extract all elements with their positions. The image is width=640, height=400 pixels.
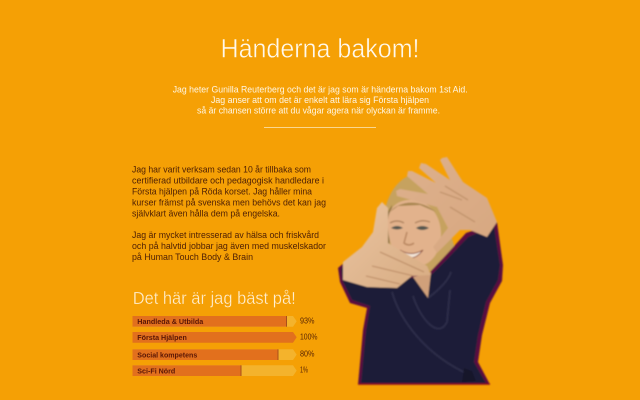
bar: Handleda & Utbilda 93% [132, 316, 315, 327]
bar: Handleda & Utbilda 93%: 93% [300, 316, 315, 325]
nose [404, 232, 414, 245]
hair [383, 176, 458, 276]
biography text: Jag har varit verksam sedan 10 år tillbaka som [132, 164, 311, 176]
bar: Handleda & Utbilda 93%: Handleda & Utbilda [137, 317, 204, 326]
intro text: Jag heter Gunilla Reuterberg och det är jag som är händerna bakom 1st Aid. [173, 84, 468, 96]
bar: Social kompetens 80%: 80% [300, 350, 315, 359]
biography text: Första hjälpen på Röda korset. Jag håller mina [132, 186, 313, 198]
bar: Social kompetens 80% [132, 349, 315, 360]
face [388, 200, 441, 266]
hand: right, raised fingers [396, 157, 497, 253]
bar: Social kompetens 80%: Social kompetens [137, 350, 197, 359]
hand: left, thumb and fingers [343, 202, 431, 288]
skill bars [132, 316, 318, 376]
intro text: Jag anser att om det är enkelt att lära sig Första hjälpen [211, 95, 429, 106]
title: Händerna bakom! [220, 34, 420, 64]
bar: Sci-Fi Nörd 1% [132, 365, 308, 376]
bar: Första Hjälpen 100%: Första Hjälpen [137, 333, 187, 342]
bar: Sci-Fi Nörd 1%: Sci-Fi Nörd [137, 366, 176, 375]
biography text: certifierad utbildare och pedagogisk handledare i [132, 176, 324, 186]
biography text [132, 164, 327, 263]
biography text: kurser främst på svenska men behövs det kan jag [132, 198, 326, 208]
eyes [391, 226, 429, 230]
skills heading: Det här är jag bäst på! [133, 288, 296, 308]
bar: Första Hjälpen 100% [132, 332, 318, 343]
bar: Första Hjälpen 100%: 100% [300, 332, 318, 341]
bar: Sci-Fi Nörd 1%: 1% [300, 366, 308, 375]
intro text [173, 84, 468, 117]
mouth [400, 250, 423, 258]
robe [338, 222, 503, 384]
neckline [413, 272, 431, 298]
photo: woman framing with her hands [338, 157, 503, 385]
biography text: Jag är mycket intresserad av hälsa och friskvård [132, 230, 319, 241]
intro text: så är chansen större att du vågar agera när olyckan är framme. [197, 106, 440, 117]
biography text: och på halvtid jobbar jag även med muskelskador [132, 241, 327, 252]
biography text: självklart även hålla dem på engelska. [132, 208, 280, 220]
biography text: på Human Touch Body & Brain [132, 252, 253, 263]
